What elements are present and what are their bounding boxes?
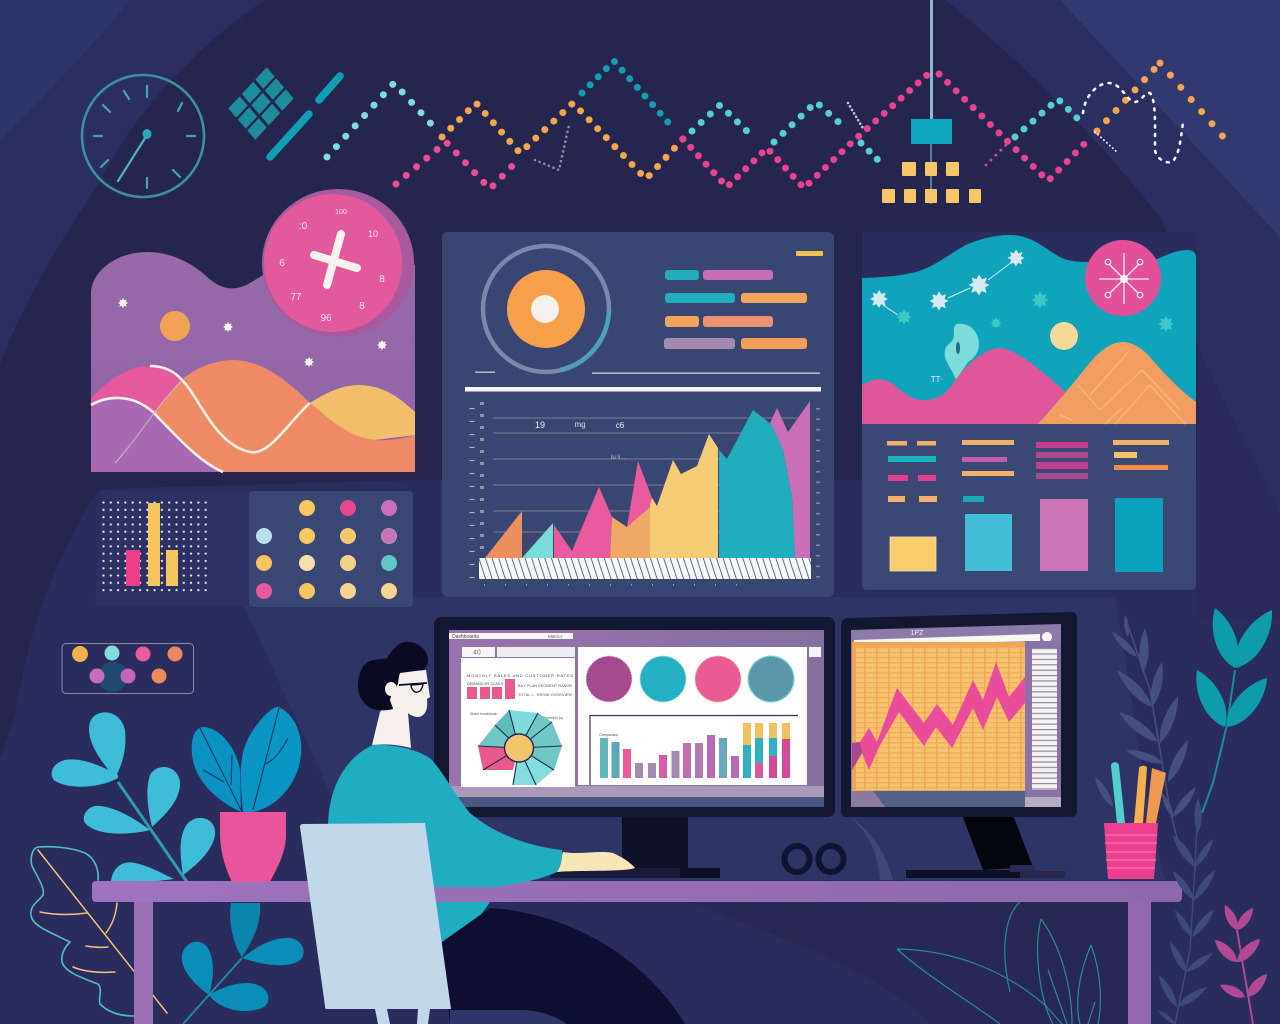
pie chart (478, 710, 562, 785)
data bars (887, 440, 1169, 572)
pink hump (91, 366, 182, 412)
title bar: Metrics (548, 634, 563, 639)
snowflake badge (1085, 240, 1161, 316)
panel: teal landscape dashboard: TT· (931, 375, 943, 384)
report page: 40 (473, 650, 481, 656)
plant: navy fern (1092, 615, 1199, 850)
desk (92, 881, 1182, 1024)
icon: tile grid (228, 67, 294, 140)
clock numerals: 6 (279, 258, 285, 269)
monitor stand: left (550, 815, 720, 878)
clock numerals (279, 209, 385, 324)
sweater (328, 745, 562, 887)
lower body (400, 895, 490, 942)
legend pills (664, 251, 823, 349)
clock hands (314, 234, 357, 285)
report page: BUY PLAN SEGMENT RANGE (518, 684, 572, 688)
area chart: c6 (616, 421, 625, 430)
pink hill (862, 348, 1066, 424)
area chart: mg (574, 420, 586, 429)
browser bar: 1PZ (911, 630, 924, 637)
plant: under-desk outlines (897, 902, 1100, 1024)
status bar (851, 791, 1061, 807)
plant: magenta sprig (1211, 903, 1271, 1024)
spreadsheet (852, 642, 1025, 791)
orange hill (1038, 342, 1196, 424)
pendant org chart (882, 0, 981, 204)
monitor: right (841, 612, 1077, 817)
panel: dot matrix (249, 491, 413, 607)
plant: pot (220, 812, 286, 882)
plant: light blue branch (52, 712, 215, 882)
plant: lower fern (1156, 798, 1218, 1024)
icon: wall clock (82, 75, 204, 197)
hair (358, 642, 428, 710)
clock numerals: 8 (359, 301, 365, 312)
report page: MONTHLY SALES AND CUSTOMER RATES (467, 673, 573, 678)
chair base (450, 1010, 567, 1024)
stats page (578, 647, 821, 785)
plant: potted leaves (192, 707, 301, 812)
person (328, 642, 635, 887)
plant: teal sprig (1188, 604, 1280, 813)
pants (442, 908, 685, 1024)
clock numerals: 10 (368, 229, 378, 239)
clock numerals: 8 (379, 274, 385, 285)
panel: mini bar chart (95, 491, 249, 606)
bar chart (590, 716, 798, 785)
report page: TOTAL L. TREND OVERVIEW (518, 693, 572, 697)
moon (1050, 322, 1078, 350)
lower purple (91, 398, 223, 472)
side list (1025, 641, 1061, 797)
bar chart: Comparison (599, 733, 618, 737)
icon: cable rings (784, 846, 844, 872)
report page: Share breakdown (470, 712, 497, 716)
plant: outline leaf (31, 847, 167, 1016)
glasses (399, 683, 427, 692)
monitor stand: right (850, 815, 1065, 880)
browser bar (854, 630, 1052, 645)
wave lines (91, 366, 310, 472)
dividers (592, 372, 820, 374)
stars (118, 298, 387, 367)
panel: teal landscape dashboard (862, 232, 1196, 590)
dotted line chart (327, 61, 1225, 189)
title bar (449, 633, 573, 640)
ghost shape (945, 324, 979, 380)
title bar: Dashboards (452, 634, 479, 640)
donut gauge (483, 246, 609, 372)
report page: Proportion by (542, 716, 563, 720)
area chart (472, 401, 818, 586)
hand (557, 852, 635, 872)
chair (300, 823, 451, 1024)
clock numerals: 77 (290, 292, 302, 303)
plant: under-desk branch (182, 903, 304, 1024)
area chart: 19 (535, 420, 545, 430)
line chart (852, 662, 1025, 770)
clock numerals: 100 (335, 209, 347, 216)
neck and face (372, 670, 430, 748)
screen (449, 630, 824, 807)
ear (385, 682, 397, 696)
clock numerals: :0 (299, 221, 308, 232)
panel: wave landscape (91, 230, 415, 472)
report page: DEMAND BY CLASS (467, 682, 503, 686)
area chart: lu li .. (611, 455, 625, 461)
clock numerals: 96 (320, 313, 332, 324)
landscape sky (91, 230, 415, 472)
icon: slanted pills (270, 76, 340, 157)
monitor: left (434, 617, 835, 817)
orange hump (153, 360, 415, 472)
report page (461, 647, 575, 787)
teal sky (862, 235, 1196, 424)
pen cup (1104, 762, 1166, 879)
panel: central dashboard (442, 232, 834, 597)
legend dots box (62, 644, 194, 694)
yellow hump (310, 385, 415, 440)
sun (160, 311, 190, 341)
pink clock (262, 189, 414, 337)
constellation (870, 250, 1174, 332)
